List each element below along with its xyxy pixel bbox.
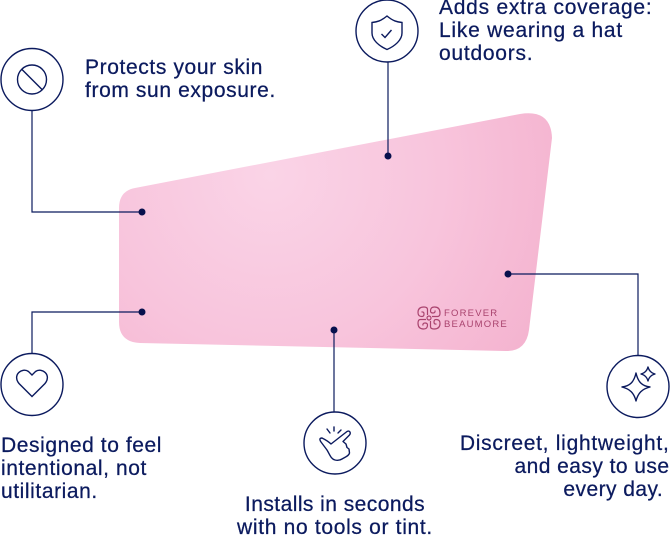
text: sun protection <box>85 56 276 102</box>
text: discreet: Discreet, lightweight, <box>460 432 670 455</box>
logo: Forever Beaumore: FOREVER <box>444 308 498 319</box>
logo: Forever Beaumore: BEAUMORE <box>444 319 508 330</box>
icon: shield <box>356 0 418 62</box>
text: installs: Installs in seconds <box>245 493 425 516</box>
text: designed: utilitarian. <box>1 480 98 503</box>
callout line: discreet <box>504 270 638 355</box>
callout line: designed <box>32 308 146 353</box>
text: sun protection: Protects your skin <box>85 56 263 79</box>
text: coverage: Like wearing a hat <box>439 19 623 42</box>
text: discreet: and easy to use <box>514 455 670 478</box>
text: designed <box>1 434 162 503</box>
text: designed: intentional, not <box>1 457 147 480</box>
text: discreet <box>460 432 670 501</box>
text: coverage <box>438 0 652 65</box>
callout line: sun protection <box>32 110 146 216</box>
icon: sparkles <box>607 356 669 418</box>
icon: heart <box>1 354 63 416</box>
icon: finger snap hand <box>304 412 366 474</box>
callout line: installs <box>330 326 338 412</box>
pink shade panel <box>119 113 552 351</box>
text: designed: Designed to feel <box>1 434 162 457</box>
icon: no sun <box>1 48 63 110</box>
text: discreet: every day. <box>563 478 663 501</box>
callout line: coverage <box>384 62 392 160</box>
text: installs <box>236 493 433 539</box>
logo: Forever Beaumore <box>418 307 508 330</box>
text: installs: with no tools or tint. <box>237 516 433 539</box>
text: coverage: outdoors. <box>439 42 533 65</box>
text: sun protection: from sun exposure. <box>85 79 276 102</box>
